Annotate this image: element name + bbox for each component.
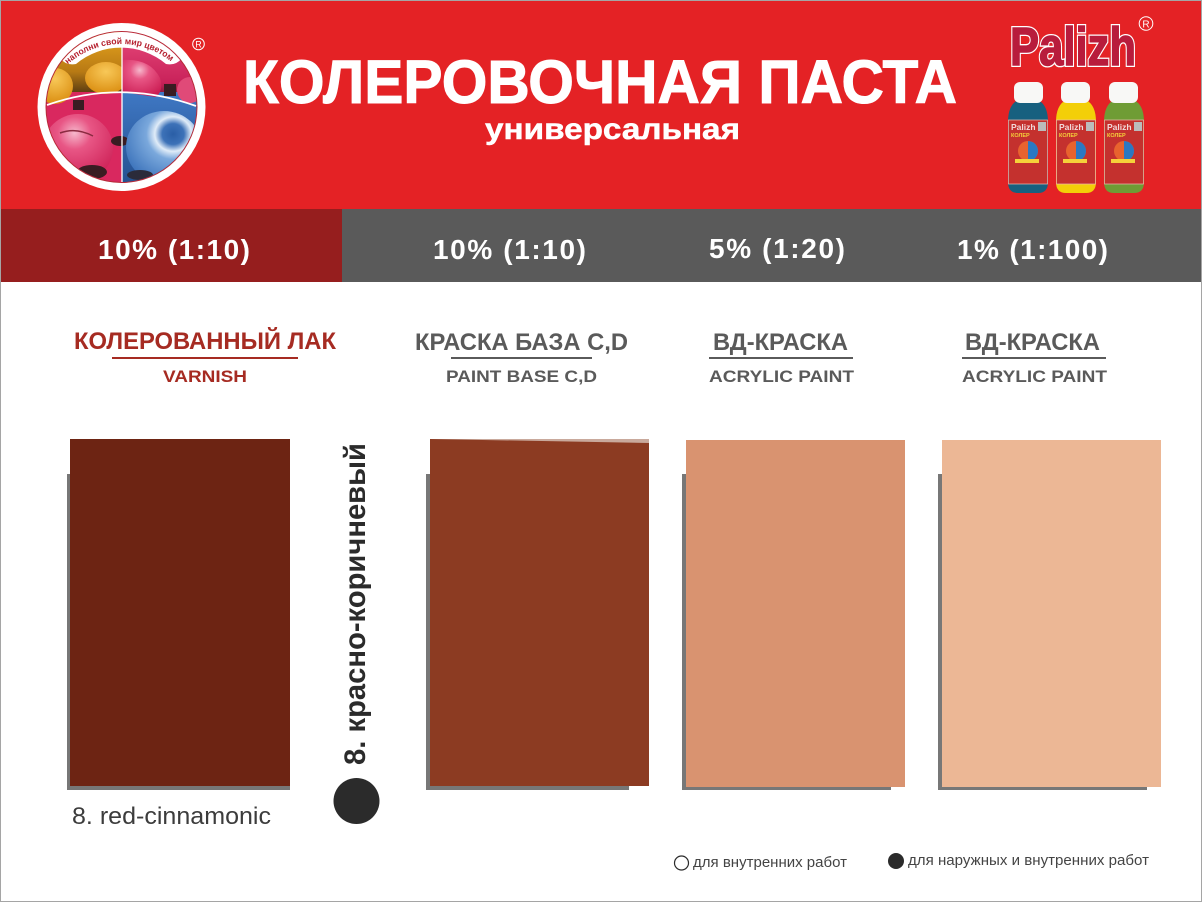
logo: apples in a circle (38, 23, 206, 191)
column heading: varnish: КОЛЕРОВАННЫЙ ЛАК (74, 327, 336, 355)
colour name English: 8. red-cinnamonic (72, 803, 271, 830)
logo registered mark: R (195, 40, 202, 50)
swatch: acrylic 5% (682, 440, 905, 790)
brand logo Palizh: Palizh (1010, 17, 1136, 77)
swatch: varnish (67, 439, 290, 790)
legend: interior use: для внутренних работ (693, 855, 847, 871)
bottle: yellow: Palizh (1059, 122, 1084, 132)
bottle: green: Palizh (1107, 122, 1132, 132)
swatch: paint base (426, 439, 649, 790)
column heading: varnish: VARNISH (163, 367, 247, 386)
legend: exterior and interior use: для наружных и внутренних работ (908, 853, 1149, 869)
swatch: acrylic 1% (938, 440, 1161, 790)
subtitle: универсальная (485, 113, 740, 146)
brand logo Palizh: R (1142, 20, 1150, 30)
logo slogan: наполни свой мир цветом (65, 38, 174, 64)
column heading: paint base: PAINT BASE C,D (446, 367, 597, 386)
column heading: acrylic 5%: ACRYLIC PAINT (709, 367, 855, 386)
ratio bar (1, 209, 1201, 282)
logo registered mark (193, 38, 204, 50)
title: КОЛЕРОВОЧНАЯ ПАСТА (243, 48, 957, 116)
colour name Russian (vertical): 8. красно-коричневый (339, 443, 372, 765)
column heading: acrylic 1%: ACRYLIC PAINT (962, 367, 1108, 386)
column heading: paint base (415, 329, 628, 386)
column heading: paint base: КРАСКА БАЗА С,D (415, 329, 628, 356)
bottle: yellow: КОЛЕР (1059, 133, 1078, 139)
bottle: blue (1008, 82, 1048, 193)
bottle: blue: КОЛЕР (1011, 133, 1030, 139)
ratio label 1: 10% (1:10) (98, 234, 250, 265)
header band (1, 1, 1201, 209)
brand logo Palizh: Palizh (1010, 17, 1136, 77)
ratio label 2: 10% (1:10) (433, 234, 586, 265)
column heading: varnish (74, 327, 336, 386)
column heading: acrylic 1% (962, 329, 1108, 386)
ratio label 3: 5% (1:20) (709, 233, 845, 264)
colour usage dot (334, 778, 380, 824)
bottle: green (1104, 82, 1144, 193)
bottle: yellow (1056, 82, 1096, 193)
column heading: acrylic 5% (709, 329, 855, 386)
bottle: green: КОЛЕР (1107, 133, 1126, 139)
ratio label 4: 1% (1:100) (957, 234, 1108, 265)
bottle: blue: Palizh (1011, 122, 1036, 132)
column heading: acrylic 1%: ВД-КРАСКА (965, 329, 1100, 356)
column heading: acrylic 5%: ВД-КРАСКА (713, 329, 848, 356)
